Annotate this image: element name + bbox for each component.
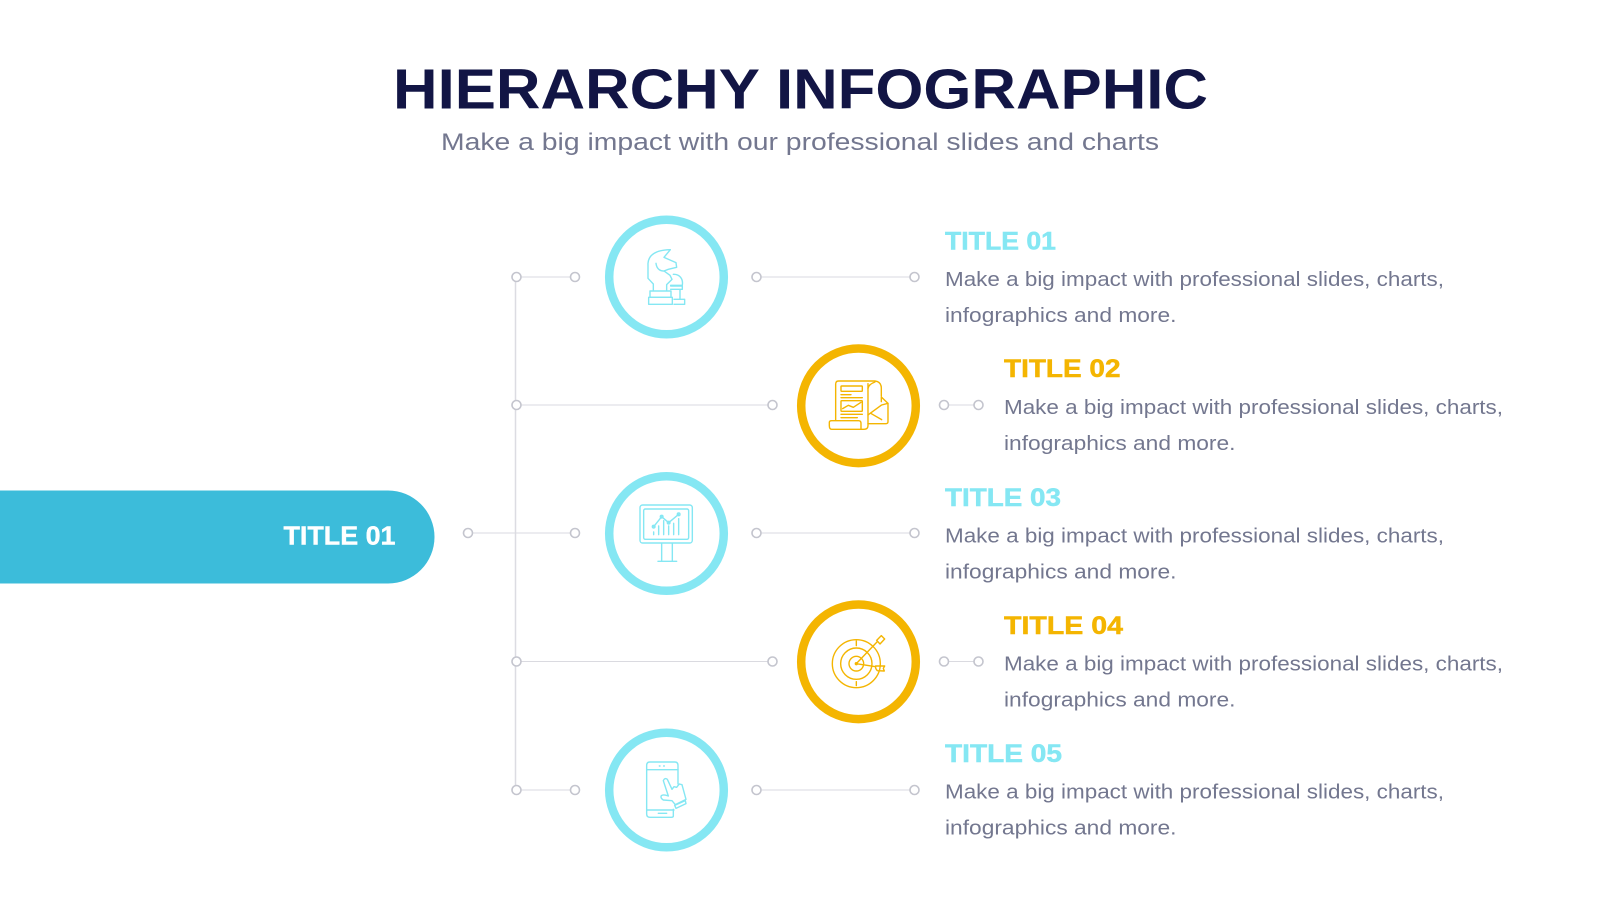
circle 01 (609, 220, 724, 334)
circle 02 (801, 348, 916, 463)
icon: document and envelope (829, 381, 888, 429)
text block 03: infographics and more. (945, 562, 1176, 584)
text block 04: Make a big impact with professional slides, charts, (1004, 654, 1503, 676)
text block 03: TITLE 03 (945, 484, 1061, 512)
text block 03 (945, 484, 1444, 584)
text block 02 (1004, 355, 1503, 455)
main title bar: TITLE 01 (284, 522, 396, 550)
text block 04: TITLE 04 (1004, 612, 1123, 640)
text block 01 (945, 228, 1444, 327)
connector tree (464, 272, 983, 794)
subtitle: Make a big impact with our professional slides and charts (441, 129, 1159, 156)
text block 01: Make a big impact with professional slides, charts, (945, 269, 1444, 291)
title: HIERARCHY INFOGRAPHIC (393, 58, 1208, 122)
circle 05 (609, 733, 724, 847)
circle 03 (609, 476, 724, 591)
icon: smartphone with pointing hand (647, 762, 686, 817)
text block 05 (945, 740, 1444, 840)
text block 01: infographics and more. (945, 305, 1176, 327)
icon: chess knight and pawn (648, 250, 685, 304)
text block 05: TITLE 05 (945, 740, 1062, 768)
main title bar (0, 490, 434, 584)
text block 01: TITLE 01 (945, 228, 1056, 256)
icon: target with arrows (832, 636, 885, 688)
text block 05: Make a big impact with professional slides, charts, (945, 782, 1444, 804)
text block 04 (1004, 612, 1503, 712)
circle 04 (801, 604, 916, 719)
text block 02: infographics and more. (1004, 433, 1236, 455)
text block 02: Make a big impact with professional slides, charts, (1004, 397, 1503, 419)
text block 04: infographics and more. (1004, 690, 1236, 712)
text block 05: infographics and more. (945, 818, 1176, 840)
text block 03: Make a big impact with professional slides, charts, (945, 526, 1444, 548)
text block 02: TITLE 02 (1004, 355, 1120, 383)
icon: presentation board with chart (640, 505, 692, 561)
